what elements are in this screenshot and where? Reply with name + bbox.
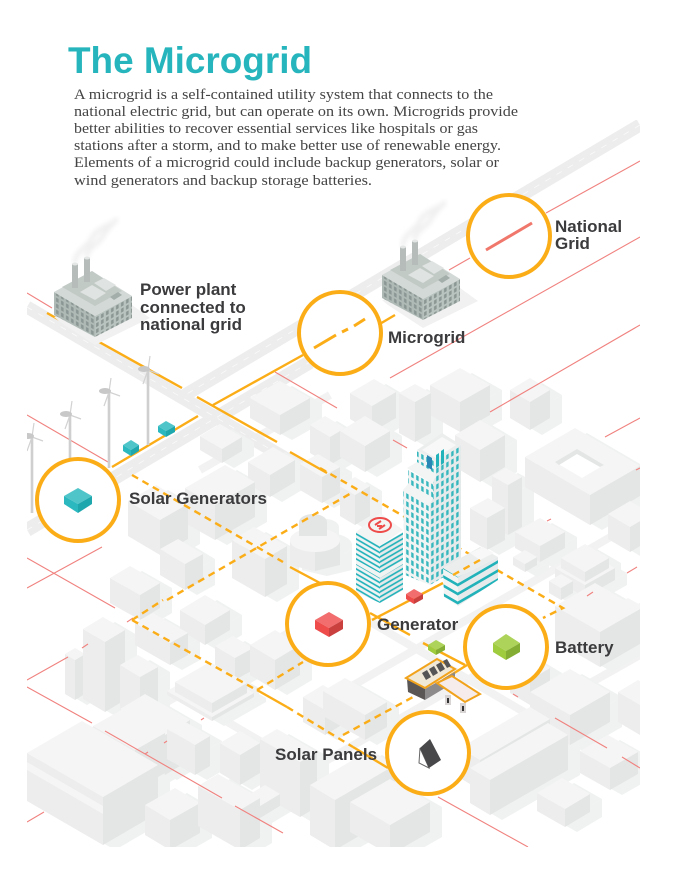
wind turbines — [22, 356, 159, 513]
intro text: Elements of a microgrid could include backup generators, solar or — [74, 155, 499, 171]
intro text: wind generators and backup storage batteries. — [74, 173, 372, 189]
city buildings — [27, 368, 660, 855]
isometric city map — [22, 125, 660, 855]
lines crossing feature buildings — [453, 560, 480, 575]
icon: helipad — [369, 518, 391, 532]
microgrid solid and dashed lines — [47, 313, 563, 768]
callout: solar generators: Solar Generators — [129, 489, 267, 508]
callout: national grid: Grid — [555, 234, 590, 253]
intro text: stations after a storm, and to make better use of renewable energy. — [74, 138, 501, 154]
callout: national grid — [468, 195, 622, 277]
intro text — [74, 87, 518, 189]
label: power plant — [140, 280, 246, 334]
power plants — [54, 203, 478, 345]
small cubes on map — [123, 421, 445, 655]
label: power plant: connected to — [140, 298, 246, 317]
callout: battery — [465, 606, 614, 688]
callout: generator: Generator — [377, 615, 459, 634]
callout: solar panels: Solar Panels — [275, 745, 377, 764]
callout: national grid: National — [555, 217, 622, 236]
roads — [27, 125, 640, 835]
callout: solar generators — [37, 459, 267, 541]
callout: solar panels — [275, 712, 469, 794]
skyscraper — [403, 433, 461, 585]
intro text: better abilities to recover essential services like hospitals or gas — [74, 121, 478, 137]
intro text: A microgrid is a self-contained utility system that connects to the — [74, 87, 493, 103]
label: power plant: national grid — [140, 315, 242, 334]
low office building — [443, 547, 498, 606]
callout: microgrid: Microgrid — [388, 328, 465, 347]
callout: generator — [287, 583, 459, 665]
callout: microgrid — [299, 292, 465, 374]
label: power plant: Power plant — [140, 280, 237, 299]
intro text: national electric grid, but can operate on its own. Microgrids provide — [74, 104, 518, 120]
title: The Microgrid — [68, 40, 312, 81]
gas station with solar panels — [406, 659, 480, 713]
callout: battery: Battery — [555, 638, 614, 657]
hospital — [356, 513, 403, 603]
national grid lines — [27, 161, 640, 847]
